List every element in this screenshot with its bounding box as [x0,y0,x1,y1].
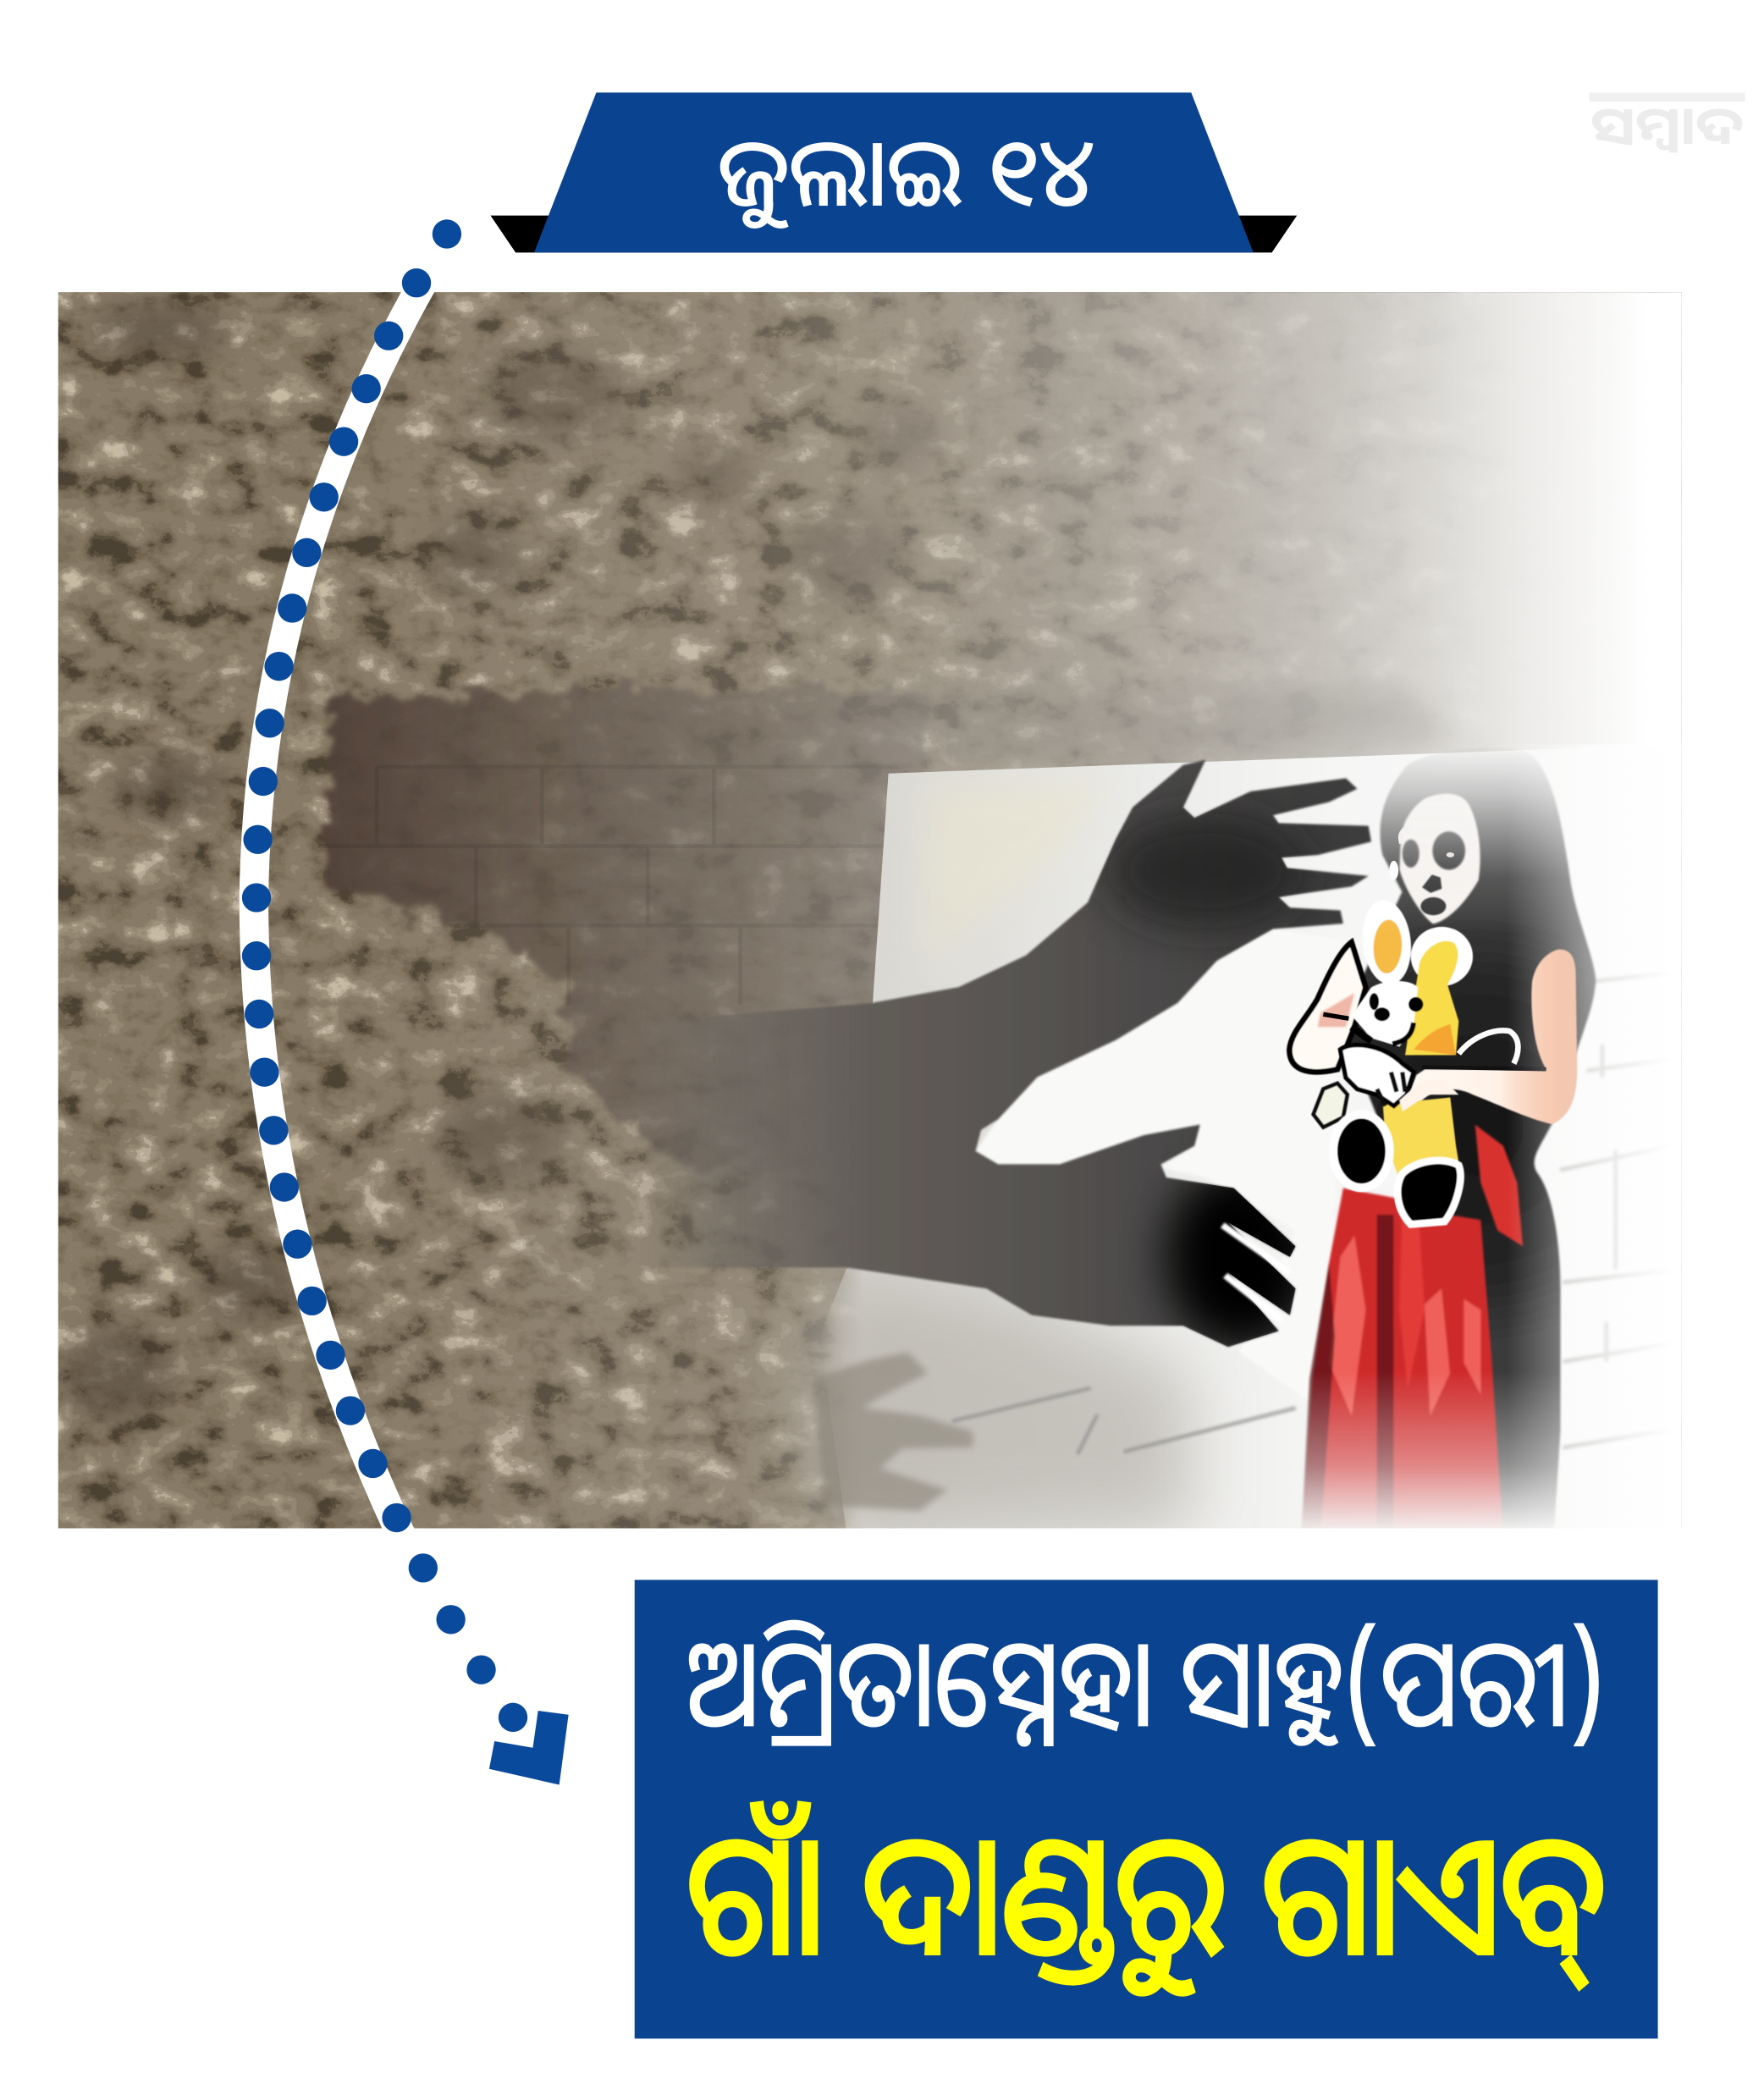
paw [1340,1045,1414,1106]
girl's upper and fore arm [1403,950,1577,1124]
photo illustration: shadow hands reaching for girl on wall [58,292,1682,1537]
small patch [1314,1083,1348,1127]
light wall behind figures [793,744,1682,1529]
arrow head [489,1711,569,1785]
girl's left arm [1289,942,1365,1072]
eyes [1432,831,1465,870]
nose and mouth [1422,874,1442,893]
arm and hand shadows [622,759,1371,1347]
ears [1359,898,1415,987]
red skirt [1301,1125,1523,1537]
head [1352,981,1418,1047]
wall brick lines [952,972,1682,1454]
date ribbon [490,92,1297,252]
face, arms and bunny [1289,794,1577,1225]
small faint hand shadow [813,1352,973,1511]
teddy bunny [1314,898,1473,1225]
white curved band [254,271,430,1553]
dotted arc [242,219,527,1732]
large dark stains on wall [66,304,939,1421]
right fade [1508,744,1682,1529]
dark brick band behind arm [317,687,925,1163]
hair and black dress silhouette [1341,747,1596,1537]
headline panel [635,1580,1658,2038]
name line: ଅମ୍ରିତାସ୍ନେହା ସାହୁ(ପରୀ) [686,1596,1606,1761]
hand over bunny [1399,1081,1458,1111]
fading veil to the right [433,292,1682,1529]
lower body [1382,1098,1462,1179]
white gap between arms [977,940,1292,1361]
girl figure [1289,747,1596,1537]
textured wall [58,292,1682,1529]
soft dark strip above light wall [929,684,1442,753]
headline line: ଗାଁ ଦାଣ୍ଡରୁ ଗାଏବ୍ [686,1775,1606,2002]
feet [1333,1115,1390,1188]
hair flick [1400,827,1411,844]
date text: ଜୁଲାଇ ୧୪ [718,107,1094,233]
face [1399,794,1480,924]
watermark logo: ସମ୍ବାଦ [1590,88,1744,160]
